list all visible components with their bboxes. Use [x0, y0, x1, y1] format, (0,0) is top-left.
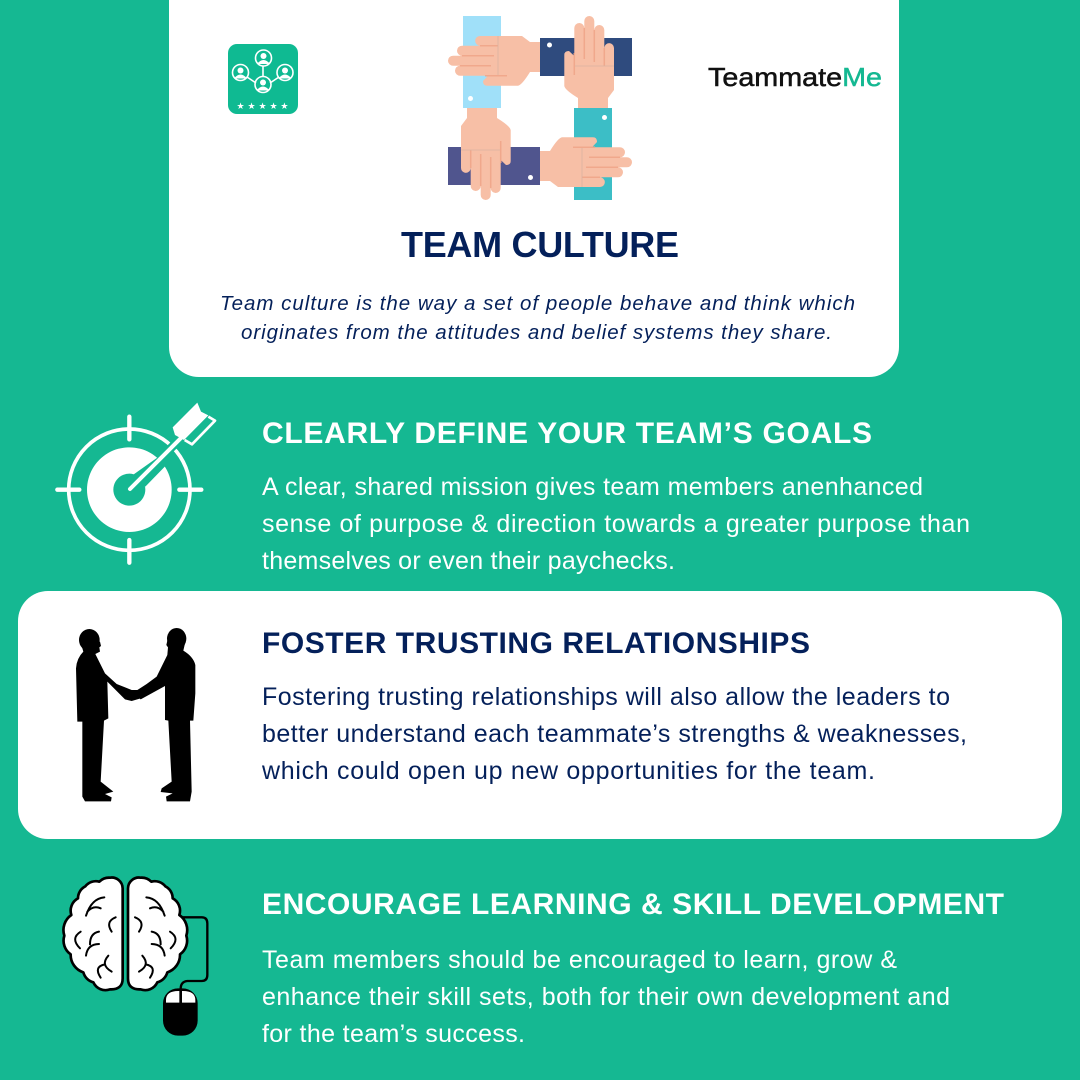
TeammateMe wordmark: Teammate Me [708, 62, 882, 92]
text: learning description [262, 946, 950, 1048]
text: learning description: enhance their skill sets, both for their own development and [262, 983, 950, 1011]
icon: TeammateMe app logo: ★★★★★ [236, 102, 288, 112]
panel: foster trusting relationships [18, 591, 1062, 839]
panel: team culture header [169, 0, 899, 377]
definition text [220, 292, 855, 344]
heading: foster trusting relationships: FOSTER TRUSTING RELATIONSHIPS [262, 627, 810, 660]
text: goals description: A clear, shared mission gives team members anenhanced [262, 473, 923, 501]
text: goals description [262, 473, 970, 575]
text: goals description: sense of purpose & direction towards a greater purpose than [262, 510, 970, 538]
text: relationships description: which could open up new opportunities for the team. [261, 757, 875, 785]
panel background [169, 0, 899, 377]
text: relationships description: better understand each teammate’s strengths & weaknesses, [262, 720, 967, 748]
title: TEAM CULTURE [401, 224, 679, 265]
panel background [18, 591, 1062, 839]
heading: encourage learning: ENCOURAGE LEARNING & SKILL DEVELOPMENT [262, 888, 1004, 921]
icon: TeammateMe app logo [228, 44, 298, 114]
icon: four linked hands [448, 16, 632, 200]
definition text: Team culture is the way a set of people behave and think which [220, 292, 855, 315]
icon: target with arrow [57, 403, 215, 563]
icon: brain connected to mouse [63, 878, 207, 1036]
text: learning description: for the team’s success. [262, 1020, 525, 1048]
text: goals description: themselves or even their paychecks. [262, 547, 675, 575]
icon: handshake silhouettes [76, 628, 195, 801]
text: relationships description [261, 683, 967, 785]
heading: clearly define goals: CLEARLY DEFINE YOUR TEAM’S GOALS [262, 417, 872, 450]
text: relationships description: Fostering trusting relationships will also allow the leaders to [262, 683, 950, 711]
text: learning description: Team members should be encouraged to learn, grow & [262, 946, 897, 974]
definition text: originates from the attitudes and belief systems they share. [241, 321, 832, 344]
